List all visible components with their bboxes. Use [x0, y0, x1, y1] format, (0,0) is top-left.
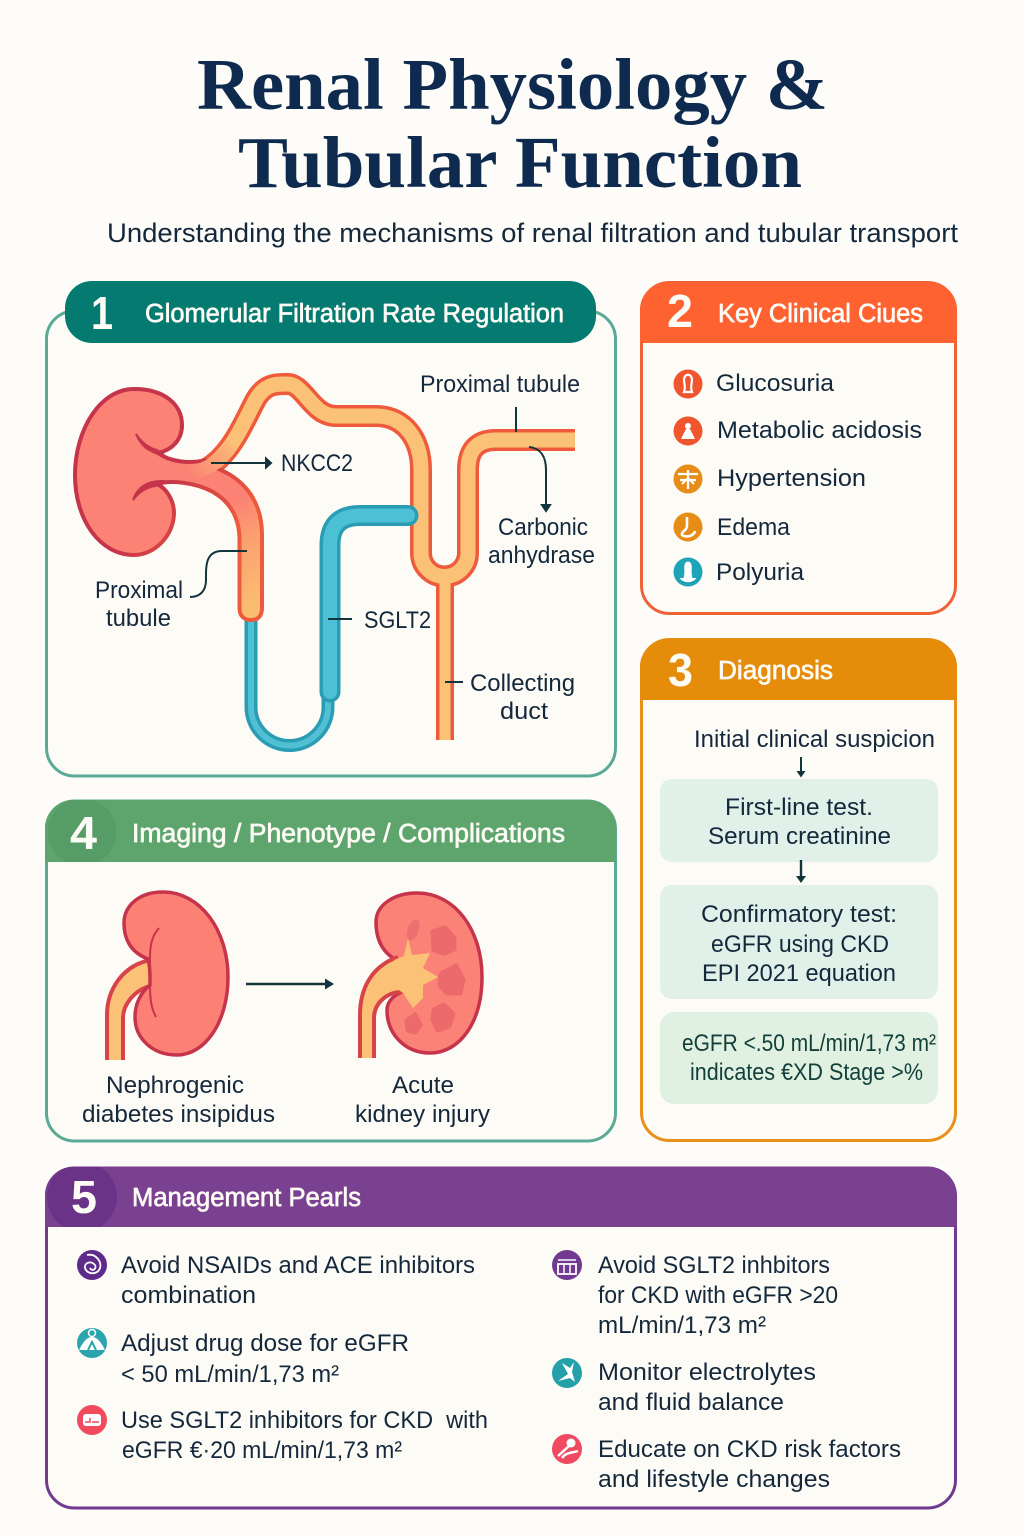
item: edema: Edema	[717, 514, 790, 541]
box: first-line test	[660, 779, 938, 862]
pearl: avoid SGLT2 inhibitors: for CKD with eGFR >20	[598, 1282, 838, 1309]
box: confirmatory test	[660, 885, 938, 999]
caption: acute kidney injury: kidney injury	[355, 1101, 491, 1128]
panel 2: key clinical clues	[640, 282, 957, 614]
caption: acute kidney injury: Acute	[392, 1072, 454, 1099]
caption: nephrogenic diabetes insipidus: diabetes insipidus	[82, 1101, 275, 1128]
header 2: 2	[667, 285, 693, 337]
header 2: Key Clinical Ciues	[718, 300, 923, 328]
pearl: educate on risk factors: Educate on CKD risk factors	[598, 1436, 901, 1463]
nephron diagram	[75, 384, 575, 746]
arrow down 2	[796, 860, 806, 883]
header 4: Imaging / Phenotype / Complications	[132, 820, 565, 848]
pearl: educate on risk factors	[552, 1434, 901, 1493]
diagram labels: tubule	[106, 605, 171, 632]
diagram labels	[95, 371, 595, 725]
header 5: 5	[71, 1171, 97, 1223]
diagram labels: Carbonic	[498, 514, 588, 541]
box: confirmatory test: Confirmatory test:	[701, 901, 897, 928]
pearl: use SGLT2 inhibitors	[77, 1405, 488, 1464]
item: polyuria	[674, 558, 804, 586]
item: edema	[674, 512, 790, 542]
header 5	[45, 1167, 956, 1227]
header 3	[640, 639, 957, 700]
panel 3: diagnosis	[640, 639, 957, 1140]
panel 4: imaging / phenotype / complications	[45, 798, 616, 1141]
arrow between kidneys	[246, 978, 334, 990]
pearl: avoid SGLT2 inhibitors	[552, 1250, 838, 1339]
pearl: adjust drug dose: Adjust drug dose for eGFR	[121, 1330, 409, 1357]
pearl: use SGLT2 inhibitors: Use SGLT2 inhibitors for CKD with	[121, 1407, 488, 1434]
subtitle: Understanding the mechanisms of renal filtration and tubular transport	[107, 218, 958, 248]
header pill 1: 1	[91, 287, 113, 339]
header 2	[640, 282, 957, 343]
pearl: avoid NSAIDs: combination	[121, 1282, 256, 1309]
box: eGFR result	[660, 1012, 938, 1104]
item: polyuria: Polyuria	[716, 559, 804, 586]
item: glucosuria: Glucosuria	[716, 370, 834, 397]
kidney: nephrogenic diabetes insipidus	[107, 892, 228, 1060]
pearl: monitor electrolytes	[552, 1358, 816, 1416]
pearl: monitor electrolytes: and fluid balance	[598, 1389, 784, 1416]
header 4: 4	[70, 807, 97, 859]
item: glucosuria	[674, 370, 834, 398]
title	[197, 44, 828, 203]
diagram labels: anhydrase	[488, 542, 595, 569]
box: eGFR result: eGFR <.50 mL/min/1,73 m²	[682, 1030, 936, 1057]
header pill 1: Glomerular Filtration Rate Regulation	[145, 300, 564, 328]
pearl: adjust drug dose: < 50 mL/min/1,73 m²	[121, 1361, 339, 1388]
pearl: use SGLT2 inhibitors: eGFR €·20 mL/min/1,73 m²	[122, 1437, 402, 1464]
caption: nephrogenic diabetes insipidus	[82, 1072, 275, 1128]
arrow down 1	[796, 757, 806, 778]
panel 5: management pearls	[45, 1162, 956, 1508]
pearl: avoid NSAIDs	[77, 1250, 475, 1309]
title: Tubular Function	[238, 122, 802, 203]
caption: acute kidney injury	[355, 1072, 491, 1128]
title: Renal Physiology &	[197, 44, 828, 125]
box: confirmatory test: EPI 2021 equation	[702, 960, 896, 987]
box: confirmatory test: eGFR using CKD	[711, 931, 889, 958]
box: first-line test: Serum creatinine	[708, 823, 891, 850]
box: eGFR result: indicates €XD Stage >%	[690, 1059, 923, 1086]
header 4	[45, 798, 616, 866]
header 5: Management Pearls	[132, 1184, 361, 1212]
diagram labels: NKCC2	[281, 450, 353, 477]
diagram labels: Proximal	[95, 577, 183, 604]
header 3: Diagnosis	[718, 657, 833, 685]
kidney and proximal limb	[75, 389, 262, 620]
kidney: acute kidney injury	[360, 893, 482, 1058]
pearl: avoid NSAIDs: Avoid NSAIDs and ACE inhibitors	[121, 1252, 475, 1279]
diagram labels: SGLT2	[364, 607, 431, 634]
item: metabolic acidosis: Metabolic acidosis	[717, 417, 922, 444]
diagram labels: duct	[500, 698, 548, 725]
pearl: avoid SGLT2 inhibitors: Avoid SGLT2 inhbitors	[598, 1252, 830, 1279]
header 3: 3	[668, 644, 693, 696]
header pill 1	[65, 281, 596, 343]
leader lines and arrows	[190, 407, 550, 682]
step: initial suspicion: Initial clinical suspicion	[694, 726, 935, 753]
item: hypertension	[674, 464, 866, 494]
pearl: educate on risk factors: and lifestyle changes	[598, 1466, 830, 1493]
pearl: monitor electrolytes: Monitor electrolytes	[598, 1359, 816, 1386]
diagram labels: Proximal tubule	[420, 371, 580, 398]
panel 1: glomerular filtration rate regulation	[46, 281, 616, 776]
pearl: adjust drug dose	[77, 1328, 409, 1388]
caption: nephrogenic diabetes insipidus: Nephrogenic	[106, 1072, 244, 1099]
box: first-line test: First-line test.	[725, 794, 873, 821]
item: hypertension: Hypertension	[717, 465, 866, 492]
diagram labels: Collecting	[470, 670, 575, 697]
pearl: avoid SGLT2 inhibitors: mL/min/1,73 m²	[598, 1312, 766, 1339]
